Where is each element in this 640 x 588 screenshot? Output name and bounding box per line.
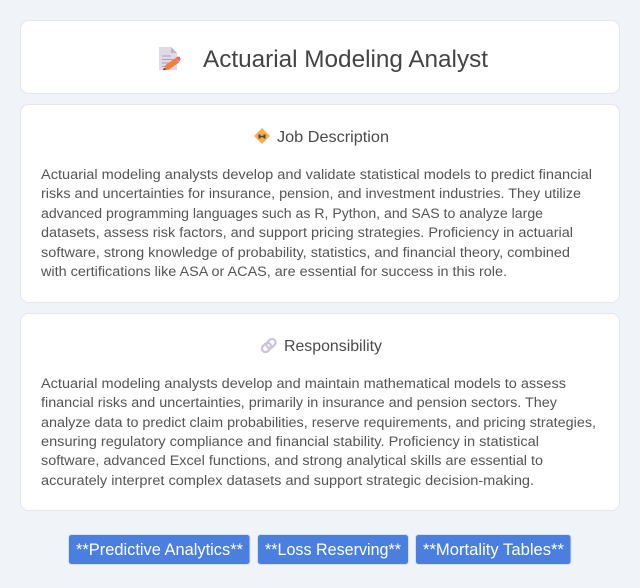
heading: job description: Job Description (277, 129, 389, 146)
text block: job description: risks and uncertainties for insurance, pension, and investment industries. They utilize (41, 186, 581, 202)
tag: loss reserving: **Loss Reserving** (265, 541, 402, 559)
tag: mortality tables (416, 534, 571, 564)
icon: orange diamond (254, 128, 270, 144)
text block: job description: Actuarial modeling analysts develop and validate statistical models to predict financial (41, 167, 592, 183)
panel: job description (20, 104, 620, 302)
text block: job description: with certifications like ASA or ACAS, are essential for success in this role. (40, 264, 507, 280)
text block: responsibility: ensuring regulatory compliance and financial stability. Proficiency in statistical (41, 434, 539, 450)
tag: loss reserving (258, 534, 408, 564)
text block: job description: advanced programming languages such as R, Python, and SAS to analyze large (41, 206, 543, 222)
text block: responsibility: software, advanced Excel functions, and strong analytical skills are essential to (41, 453, 543, 469)
tag: predictive analytics: **Predictive Analytics** (76, 541, 244, 559)
panel: responsibility (20, 314, 620, 510)
tag: predictive analytics (68, 534, 250, 564)
icon: chain link (260, 337, 277, 354)
text block: job description: software, strong knowledge of probability, statistics, and financial theory, combined (41, 245, 570, 261)
text block: responsibility: accurately interpret complex datasets and support strategic decision-making. (41, 473, 534, 489)
title: Actuarial Modeling Analyst (203, 46, 488, 73)
skill tags (68, 534, 571, 564)
text block: responsibility: Actuarial modeling analysts develop and maintain mathematical models to assess (41, 376, 566, 392)
text block: responsibility: analyze data to predict claim probabilities, reserve requirements, and pricing strategies, (41, 415, 596, 431)
panel: title card (20, 20, 620, 94)
icon: document with pencil (159, 47, 180, 70)
text block: responsibility: financial risks and uncertainties, primarily in insurance and pension sectors. They (41, 395, 558, 411)
text block: job description: datasets, assess risk factors, and support pricing strategies. Proficiency in actuarial (41, 225, 573, 241)
tag: mortality tables: **Mortality Tables** (423, 541, 565, 559)
heading: responsibility: Responsibility (284, 338, 382, 355)
text block: job description (40, 167, 592, 280)
text block: responsibility (41, 376, 596, 489)
